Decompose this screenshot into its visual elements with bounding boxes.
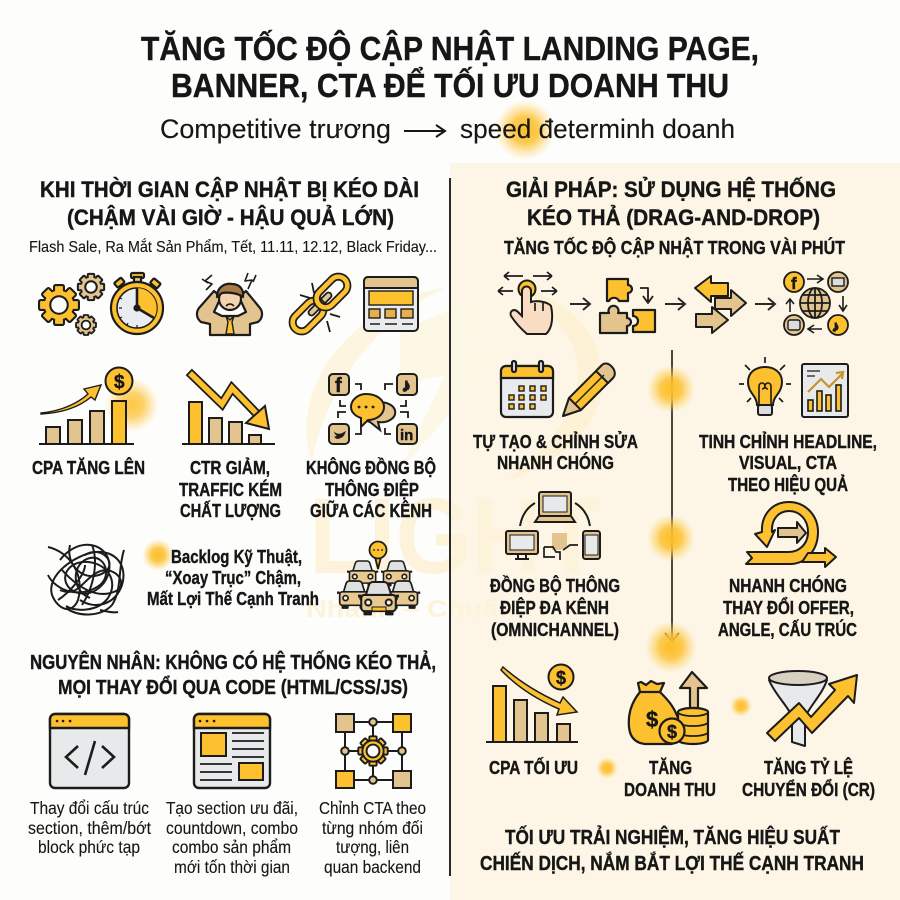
icon: gears: [39, 274, 104, 335]
icon: omnichannel globe: [784, 272, 848, 335]
icon: light bulb: [739, 357, 791, 415]
glow: subtitle: [495, 100, 555, 160]
heading: right solution: GIẢI PHÁP: SỬ DỤNG HỆ THỐNG: [506, 176, 836, 202]
chart: CTR falling: [182, 375, 275, 444]
chart: CPA optimized: [486, 664, 578, 742]
text: self create label: [473, 431, 638, 473]
text: change offer label: NHANH CHÓNG: [729, 575, 847, 596]
chart: CPA optimized: $: [556, 668, 566, 688]
text: CTR label: CTR GIẢM,: [190, 457, 270, 478]
icon: omnichannel globe: f: [791, 274, 797, 293]
text: refine label: THEO HIỆU QUẢ: [728, 474, 848, 495]
text: self create label: NHANH CHÓNG: [497, 452, 614, 473]
icon: loop arrows: [746, 502, 836, 567]
icon: money bag and coins: $: [646, 707, 658, 732]
text: conclusion: [480, 825, 864, 875]
text: sync label: KHÔNG ĐỒNG BỘ: [306, 457, 436, 478]
icon: omnichannel globe: ♪: [832, 318, 839, 334]
arrow: step 3: [755, 298, 775, 310]
arrow: step 2: [665, 298, 685, 310]
text: refine label: VISUAL, CTA: [739, 453, 837, 473]
text: edit CTA: Chỉnh CTA theo: [319, 798, 426, 818]
text: change offer label: [718, 575, 857, 640]
text: omnichannel label: [490, 575, 620, 640]
icon: network gear: [336, 714, 411, 788]
text: backlog: “Xoay Trục” Chậm,: [165, 567, 301, 588]
text: edit CTA: quan backend: [324, 857, 421, 877]
text: create section: [166, 798, 298, 877]
text: CPA optimized label: CPA TỐI ƯU: [489, 757, 578, 778]
icon: stressed person: [197, 273, 262, 335]
text: revenue label: [624, 757, 716, 800]
icon: calendar: [501, 361, 553, 417]
chart: CPA rising: $: [114, 372, 125, 393]
heading: root cause: NGUYÊN NHÂN: KHÔNG CÓ HỆ THỐNG KÉO THẢ,: [30, 650, 436, 674]
heading: right solution: [504, 176, 846, 258]
icon: disconnected channels: ♪: [402, 376, 410, 395]
text: sync label: THÔNG ĐIỆP: [325, 479, 419, 500]
text: CTR label: TRAFFIC KÉM: [179, 479, 282, 500]
watermark logo: [306, 288, 602, 623]
icon: stopwatch: [111, 273, 163, 334]
heading: left problem: (CHẬM VÀI GIỜ - HẬU QUẢ LỚN): [67, 205, 394, 230]
text: change offer label: ANGLE, CẤU TRÚC: [718, 619, 857, 640]
text: edit CTA: tượng, liên: [336, 837, 409, 857]
heading: left problem: [40, 177, 419, 230]
title: BANNER, CTA ĐỂ TỐI ƯU DOANH THU: [171, 66, 729, 104]
icon: disconnected channels: [329, 374, 417, 444]
subtitle: [160, 114, 735, 144]
text: conclusion: TỐI ƯU TRẢI NGHIỆM, TĂNG HIỆU SUẤT: [505, 825, 840, 849]
divider arrow: center of solution panel: [665, 350, 679, 641]
text: omnichannel label: ĐIỆP ĐA KÊNH: [500, 597, 609, 618]
icon: traffic jam: [337, 542, 420, 614]
icon: direction arrows: [695, 276, 746, 333]
text: create section: combo sản phẩm: [172, 837, 291, 857]
glow: CPA chart: [105, 378, 159, 432]
icon: chart board: [802, 364, 848, 417]
chart: CPA rising: [39, 368, 134, 444]
text: refine label: TINH CHỈNH HEADLINE,: [699, 431, 877, 452]
icon: money bag and coins: [629, 672, 708, 744]
text: edit CTA: [319, 798, 426, 877]
icon: puzzle pieces: [600, 279, 655, 333]
text: change structure: [28, 798, 151, 857]
text: events list: Flash Sale, Ra Mắt Sản Phẩm, Tết, 11.11, 12.12, Black Friday...: [29, 237, 437, 256]
subtitle: speed đeterminh doanh: [460, 114, 735, 144]
glow: backlog: [142, 539, 174, 571]
text: revenue label: DOANH THU: [624, 780, 716, 800]
glow: solution dots: [596, 365, 752, 779]
text: sync label: [306, 457, 436, 521]
icon: drag hand: [498, 272, 557, 334]
watermark logo: LIGHT: [309, 475, 601, 596]
text: backlog: Mất Lợi Thế Cạnh Tranh: [147, 588, 319, 609]
text: change offer label: THAY ĐỔI OFFER,: [723, 597, 854, 618]
arrow: step 1: [570, 298, 590, 310]
icon: code window: [50, 714, 129, 788]
text: omnichannel label: ĐỒNG BỘ THÔNG: [490, 575, 620, 596]
heading: right solution: TĂNG TỐC ĐỘ CẬP NHẬT TRONG VÀI PHÚT: [504, 237, 846, 258]
title: TĂNG TỐC ĐỘ CẬP NHẬT LANDING PAGE,: [141, 29, 759, 67]
icon: layout window: [194, 714, 270, 788]
text: omnichannel label: (OMNICHANNEL): [491, 620, 619, 640]
heading: root cause: MỌI THAY ĐỔI QUA CODE (HTML/CSS/JS): [58, 675, 408, 699]
text: conversion label: [742, 757, 875, 800]
icon: money bag and coins: $: [667, 722, 677, 742]
heading: root cause: [30, 650, 436, 699]
watermark logo: Nhanh – Chuẩn: [306, 596, 516, 623]
subtitle: Competitive trương: [160, 114, 391, 144]
panel: solution background: [450, 163, 900, 900]
text: create section: Tạo section ưu đãi,: [166, 798, 298, 818]
icon: disconnected channels: in: [400, 427, 413, 444]
text: refine label: [699, 431, 877, 495]
text: backlog: [147, 546, 319, 609]
text: revenue label: TĂNG: [649, 757, 692, 778]
text: CPA label: CPA TĂNG LÊN: [32, 457, 145, 478]
text: CTR label: [179, 457, 282, 521]
icon: tangled scribble: [48, 545, 124, 614]
text: create section: mới tốn thời gian: [174, 857, 290, 877]
text: change structure: section, thêm/bớt: [28, 818, 151, 838]
text: change structure: Thay đổi cấu trúc: [30, 798, 149, 818]
text: change structure: block phức tạp: [38, 837, 140, 857]
icon: broken chain: [289, 273, 351, 335]
heading: right solution: KÉO THẢ (DRAG-AND-DROP): [527, 205, 820, 230]
icon: pencil: [563, 363, 615, 416]
title: [141, 29, 759, 104]
text: self create label: TỰ TẠO & CHỈNH SỬA: [473, 431, 638, 452]
icon: web page: [364, 277, 418, 331]
heading: left problem: KHI THỜI GIAN CẬP NHẬT BỊ KÉO DÀI: [40, 177, 419, 202]
text: sync label: GIỮA CÁC KÊNH: [310, 500, 432, 521]
icon: funnel with arrow: [767, 671, 857, 746]
text: create section: countdown, combo: [166, 818, 298, 838]
text: backlog: Backlog Kỹ Thuật,: [171, 546, 302, 567]
text: conversion label: TĂNG TỶ LỆ: [764, 757, 853, 778]
text: conversion label: CHUYỂN ĐỔI (CR): [742, 779, 875, 800]
text: edit CTA: từng nhóm đối: [322, 818, 423, 838]
icon: disconnected channels: f: [335, 375, 342, 397]
text: CTR label: CHẤT LƯỢNG: [180, 500, 281, 521]
divider: center column: [449, 178, 451, 876]
icon: multi devices: [506, 492, 600, 560]
